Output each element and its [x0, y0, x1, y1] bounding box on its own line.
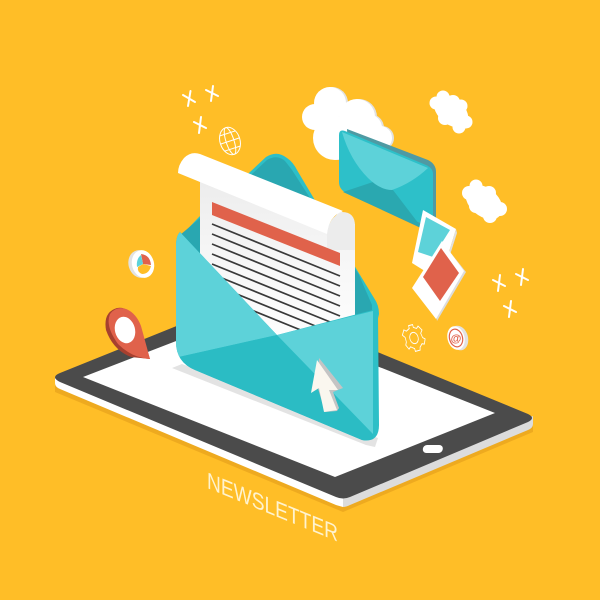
small envelope — [339, 129, 436, 230]
cursor — [311, 358, 343, 412]
icon: globe — [216, 125, 244, 157]
plus signs right — [493, 269, 528, 317]
envelope front — [176, 232, 379, 440]
red headline bar — [212, 202, 340, 266]
envelope shadow — [172, 364, 378, 447]
cloud right — [459, 178, 509, 226]
big cloud — [302, 87, 394, 160]
icon: location pin — [105, 308, 150, 359]
icon: pie chart coin — [125, 248, 157, 280]
envelope back flap — [177, 154, 379, 340]
infographic: newsletter scene — [55, 85, 533, 542]
icon: at sign coin — [445, 324, 471, 352]
icon: at sign coin: @ — [451, 333, 462, 345]
letter — [178, 153, 355, 350]
photo: red — [412, 241, 466, 321]
cloud top right — [427, 88, 475, 134]
text lines — [212, 224, 340, 346]
plus signs left — [183, 86, 218, 133]
icon: gear — [400, 322, 428, 354]
main envelope — [170, 153, 385, 450]
tablet — [55, 299, 533, 512]
letter roll — [178, 153, 343, 234]
title: NEWSLETTER: NEWSLETTER — [207, 468, 338, 547]
photo: blue — [412, 210, 457, 273]
